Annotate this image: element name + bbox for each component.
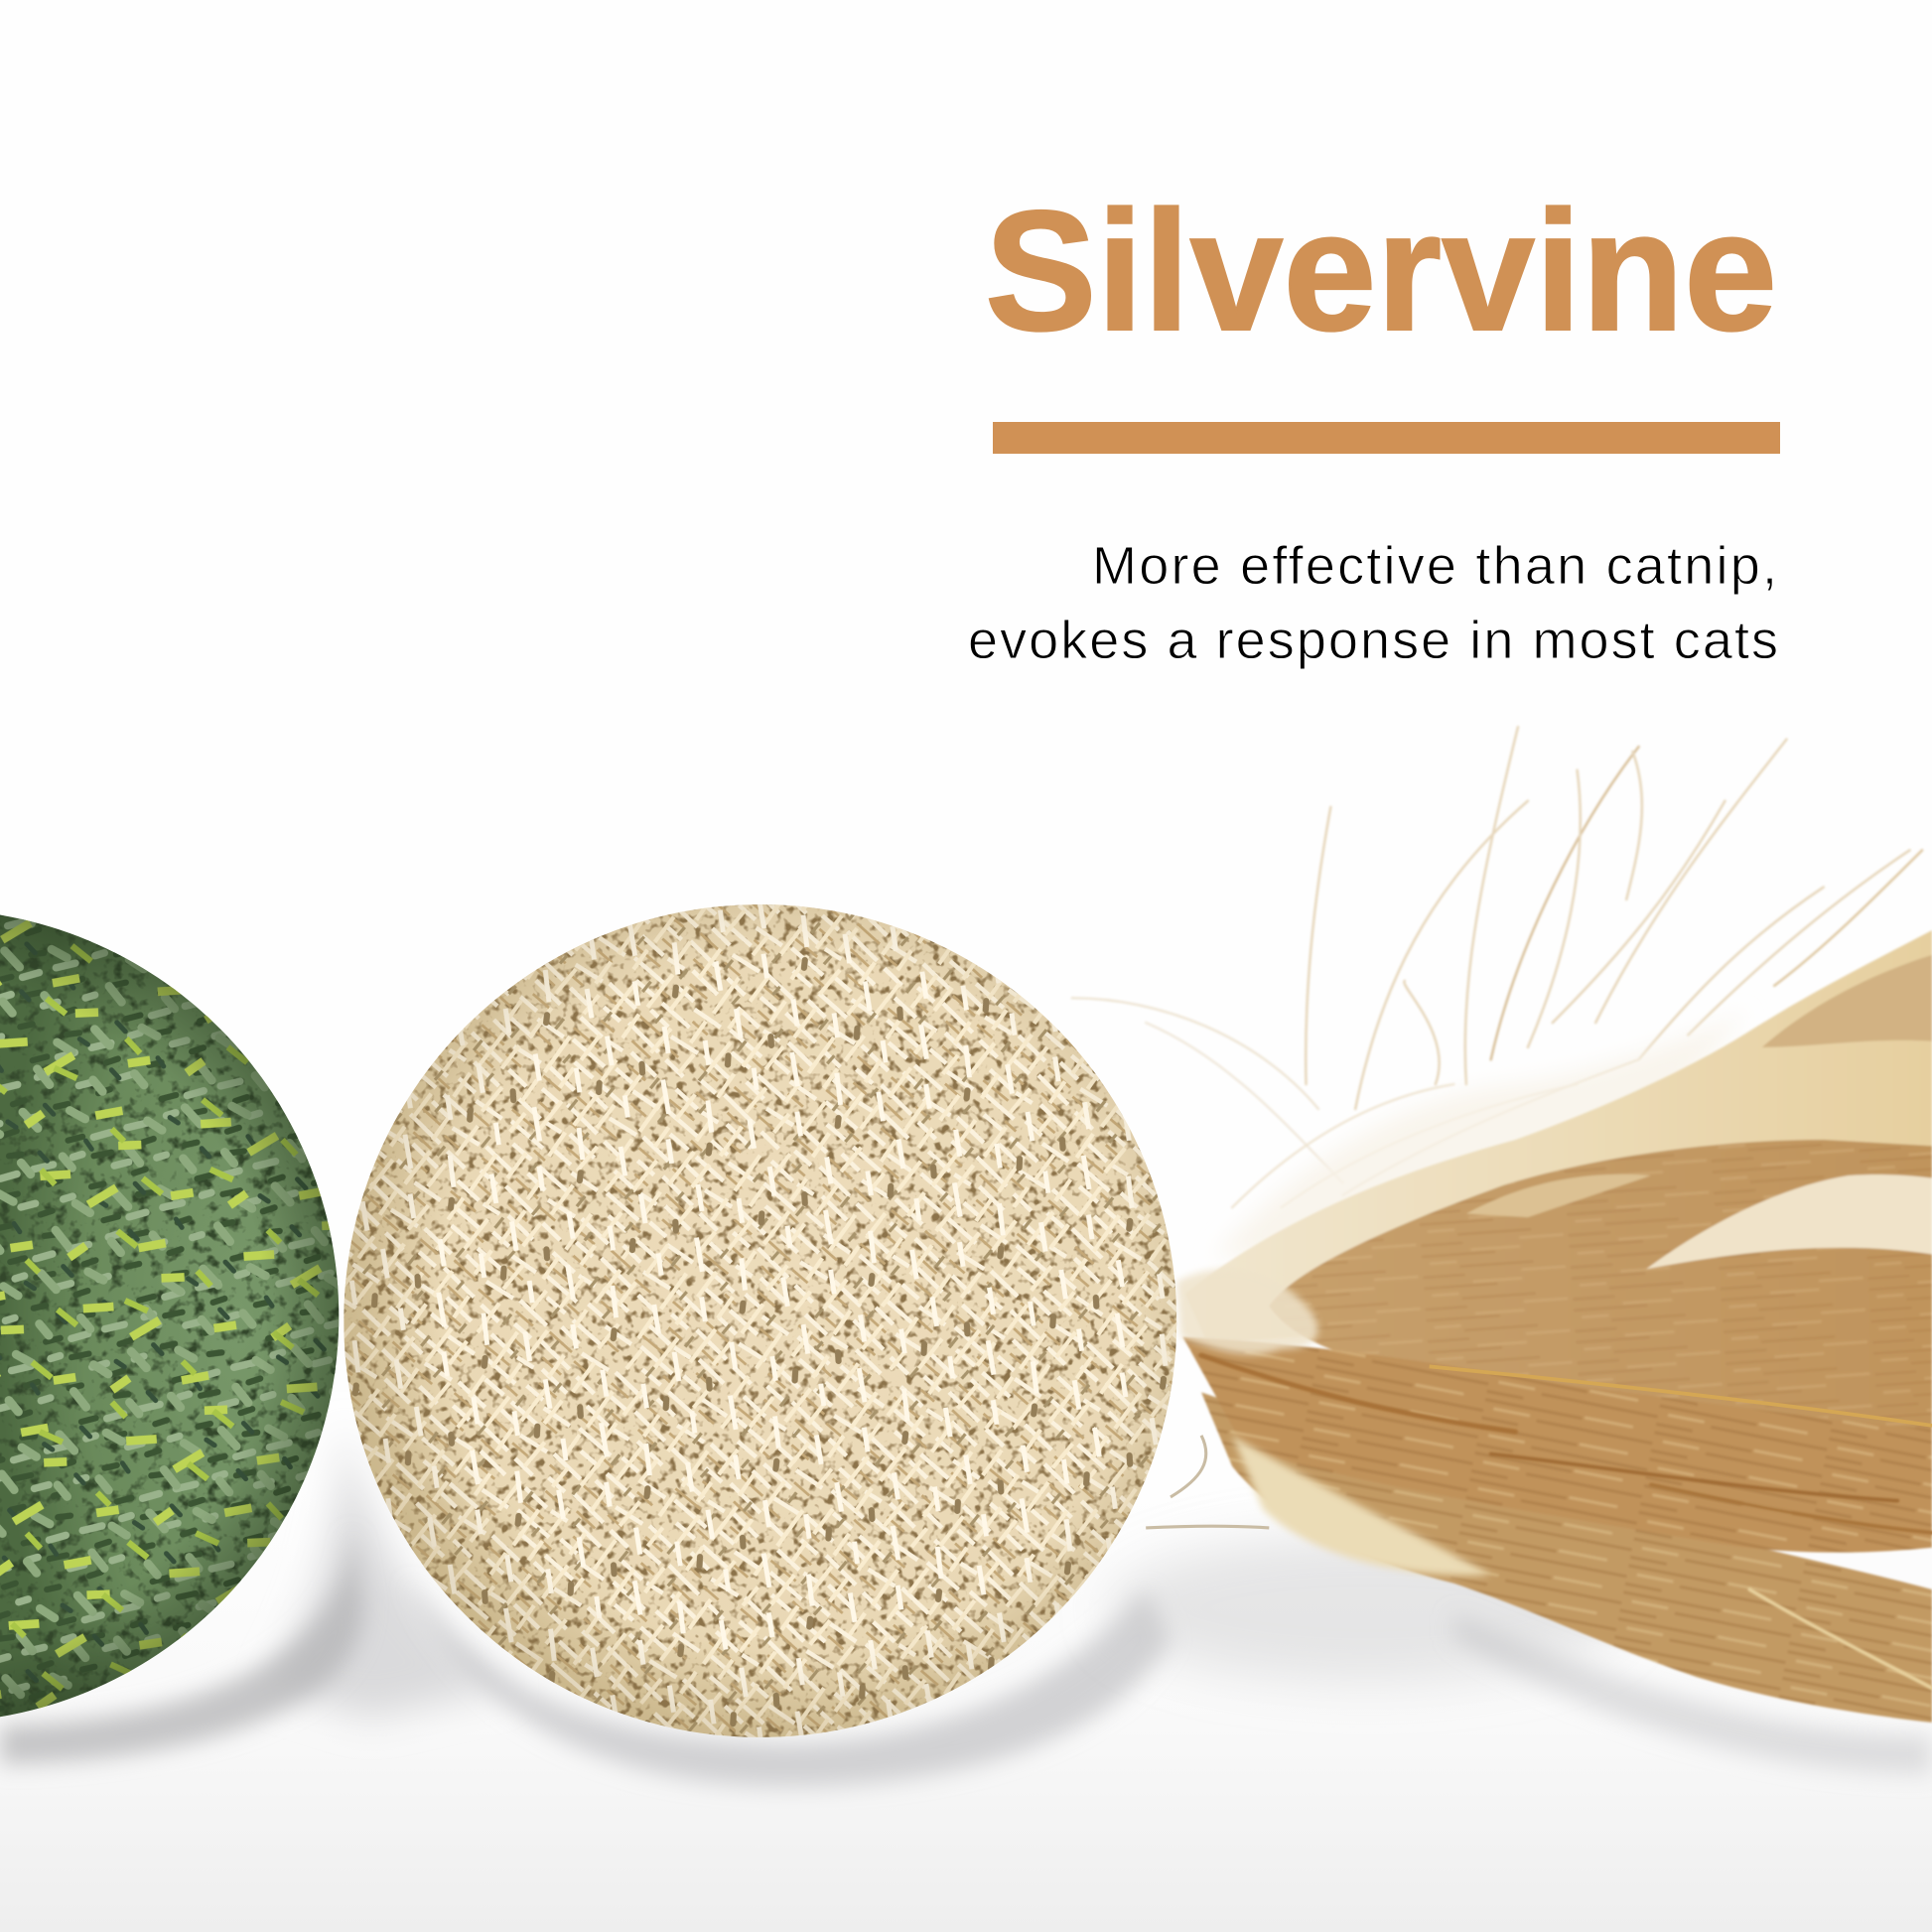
upper brown vane xyxy=(1269,1140,1932,1436)
lower brown vane xyxy=(1182,1337,1932,1553)
tan silvervine ball xyxy=(344,904,1176,1737)
green ball bright cross flakes xyxy=(0,943,320,1692)
title: Silvervine xyxy=(985,176,1777,366)
gold rachis line xyxy=(1430,1366,1932,1426)
green ball cross flakes xyxy=(0,909,341,1723)
pale edge on bottom feather xyxy=(1232,1436,1491,1576)
table surface xyxy=(0,1478,1932,1932)
pale tuft over feather base xyxy=(1176,1269,1318,1354)
subtitle xyxy=(968,536,1778,670)
upper cream feather xyxy=(1185,930,1932,1343)
tan feather tips xyxy=(1762,955,1932,1047)
green ball base xyxy=(0,909,341,1723)
green ball edge shading xyxy=(0,909,339,1723)
subtitle line 2: evokes a response in most cats xyxy=(968,611,1778,670)
tan ball fibres xyxy=(344,904,1176,1737)
bottom feather xyxy=(1201,1392,1932,1723)
feather wisps xyxy=(1072,727,1922,1207)
tan ball light chips xyxy=(344,904,1176,1737)
title underline bar xyxy=(993,422,1780,454)
string loop xyxy=(1146,1436,1269,1528)
pale highlight in upper vane xyxy=(1646,1174,1932,1269)
green ball bright flakes xyxy=(0,909,341,1723)
tan ball edge shading xyxy=(344,904,1176,1737)
green ball leaf flakes xyxy=(0,909,341,1723)
feather body softened xyxy=(1182,930,1932,1723)
mid cream streak xyxy=(1466,1174,1651,1217)
dark streaks on lower vane xyxy=(1201,1355,1932,1688)
tan ball cross fibres xyxy=(344,904,1176,1737)
product photo: toy balls and feather xyxy=(0,727,1932,1932)
tan ball base xyxy=(344,904,1176,1737)
green catnip ball xyxy=(0,909,341,1723)
subtitle line 1: More effective than catnip, xyxy=(1092,536,1777,596)
ball shadows xyxy=(0,1417,1932,1787)
pale down at feather base xyxy=(1213,1011,1749,1257)
